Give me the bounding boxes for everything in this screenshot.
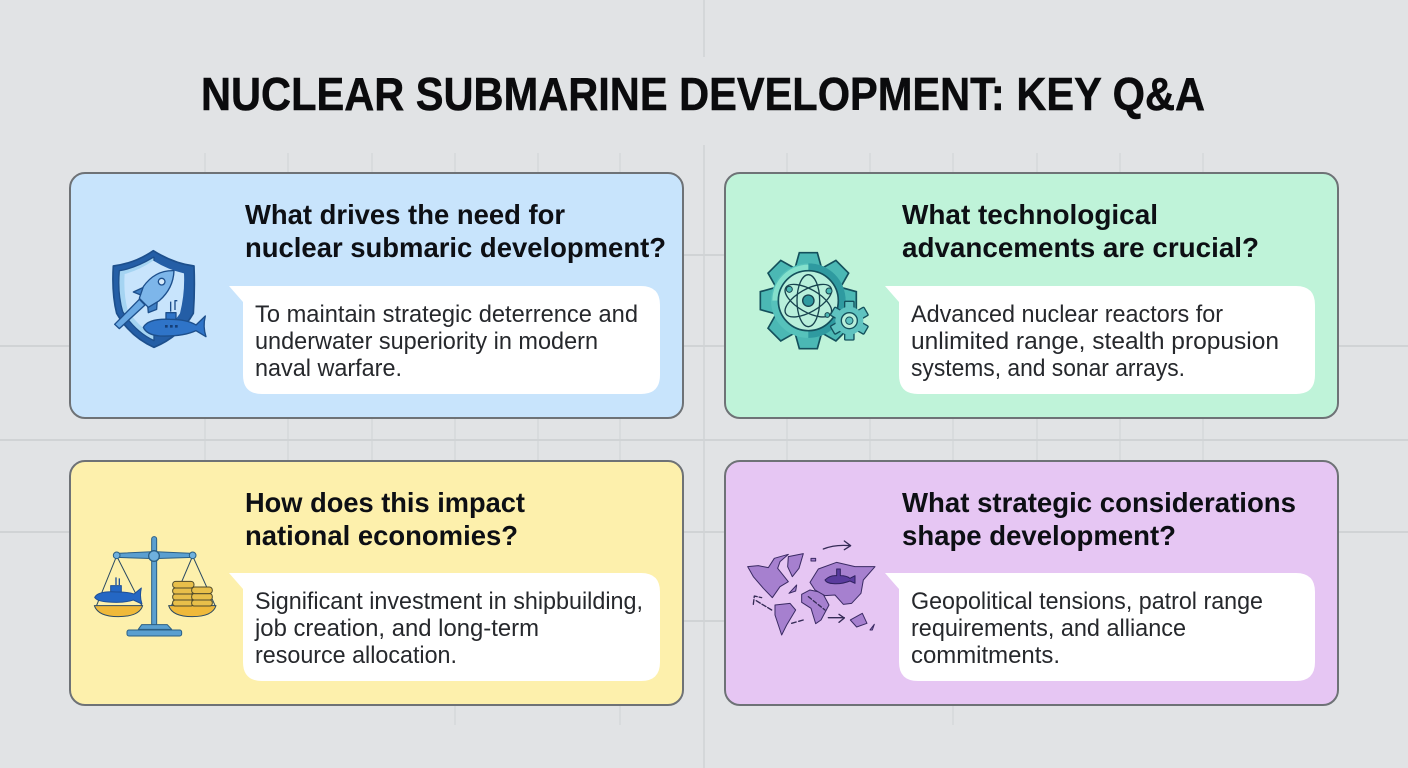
question: What strategic considerations [902,487,1296,518]
answer text: systems, and sonar arrays. [911,355,1185,382]
question: How does this impact [245,487,525,518]
panel: need for development [70,173,683,418]
question: advancements are crucial? [902,232,1259,263]
question: What drives the need for [245,199,565,230]
answer bubble [229,573,660,681]
question [902,199,1259,263]
icon: world map with patrol routes [748,541,875,635]
answer text: unlimited range, stealth propusion [911,328,1279,355]
answer bubble [229,286,660,394]
panel: national economies [70,461,683,705]
question: national economies? [245,520,518,551]
answer text: Advanced nuclear reactors for [911,301,1223,328]
answer text [911,301,1279,382]
answer text: naval warfare. [255,355,402,382]
question: What technological [902,199,1158,230]
icon: gear with atom [760,253,868,349]
answer bubble [885,573,1315,681]
question: shape development? [902,520,1176,551]
answer bubble [885,286,1315,394]
panel: technological advancements [725,173,1338,418]
question [245,199,666,263]
answer text [911,588,1263,669]
answer text: resource allocation. [255,642,457,669]
answer text: Significant investment in shipbuilding, [255,588,643,615]
answer text: To maintain strategic deterrence and [255,301,638,328]
answer text: Geopolitical tensions, patrol range [911,588,1263,615]
answer text [254,588,643,669]
question [902,487,1296,551]
answer text: requirements, and alliance [911,615,1186,642]
icon: shield, rocket and submarine [113,251,206,347]
answer text: underwater superiority in modern [255,328,598,355]
answer text [255,301,638,382]
title: NUCLEAR SUBMARINE DEVELOPMENT: KEY Q&A [201,68,1205,120]
panel: strategic considerations [725,461,1338,705]
answer text: commitments. [911,642,1060,669]
icon: balance scale with submarine and coins [94,537,216,636]
question [245,487,525,551]
question: nuclear submaric development? [245,232,666,263]
answer text: job creation, and long-term [254,615,539,642]
